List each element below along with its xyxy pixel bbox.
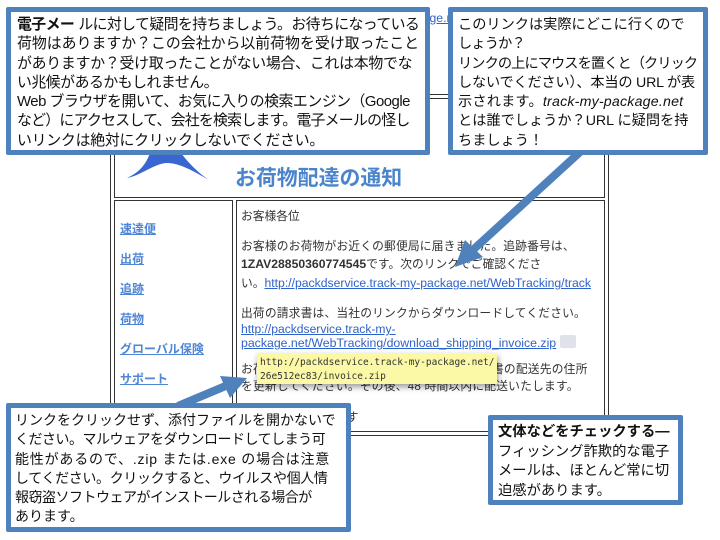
callout: where does the link go [448, 7, 708, 155]
link behind callouts: package.net [397, 11, 463, 25]
navigation cell [114, 200, 233, 432]
callout: check the tone: 迫感があります。 [498, 483, 611, 499]
callout: question the email: 電子メー ルに対して疑問を持ちましょう。お待ちになっている [17, 17, 419, 33]
navigation links: グローバル保険 [120, 342, 204, 356]
callout: check the tone: メールは、ほとんど常に切 [498, 463, 669, 479]
logo swoosh [127, 155, 209, 180]
email body text: http://packdservice.track-my- [241, 322, 396, 336]
email body text: よろしくお願いします [241, 411, 358, 424]
callout: do not open attachments [6, 403, 351, 532]
email body cell [236, 200, 605, 432]
callout: where does the link go: とは誰でしょうか？URL に疑問を持 [458, 113, 688, 129]
callout: where does the link go: ちましょう！ [458, 133, 543, 149]
callout: question the email: など）にアクセスして、会社を検索します。電子メールの怪し [17, 113, 410, 129]
callout: question the email: 荷物はありますか？この会社から以前荷物を受け取ったこと [17, 36, 419, 52]
email body text: い。http://packdservice.track-my-package.net/WebTracking/track [241, 276, 591, 290]
callout: question the email [6, 7, 430, 155]
arrow: attachment callout to tooltip [176, 376, 247, 403]
callout: do not open attachments: あります。 [15, 508, 84, 524]
navigation links: 追跡 [120, 282, 144, 296]
callout: where does the link go: このリンクは実際にどこに行くので [458, 17, 685, 33]
callout: do not open attachments: してください。クリックすると、ウイルスや個人情 [15, 470, 328, 486]
callout: do not open attachments: 能性があるので、.zip または.exe の場合は注意 [15, 451, 330, 467]
callout: question the email: いリンクは絶対にクリックしないでください。 [17, 133, 324, 149]
callout: question the email: い兆候があるかもしれません。 [17, 75, 218, 91]
tooltip: 26e512ec83/invoice.zip [260, 371, 386, 382]
callout: check the tone: 文体などをチェックする— [498, 424, 670, 440]
callout: question the email: Web ブラウザを開いて、お気に入りの検索エンジン（Google [17, 94, 410, 110]
attachment icon [560, 335, 576, 348]
callout: check the tone: フィッシング詐欺的な電子 [498, 444, 669, 460]
email body text: お荷物を受け取るには、この電子メールの請求書の配送先の住所 [241, 363, 588, 376]
callout: where does the link go: リンクの上にマウスを置くと（クリック [458, 56, 697, 72]
navigation links: 荷物 [120, 312, 144, 326]
navigation links [120, 222, 204, 386]
email body text [241, 210, 591, 424]
email outer frame [110, 94, 609, 436]
callout: do not open attachments: 報窃盗ソフトウェアがインストールされる場合が [15, 489, 312, 505]
navigation links: サポート [120, 372, 168, 386]
callout: do not open attachments: リンクをクリックせず、添付ファイルを開かないで [15, 412, 336, 428]
email body text: お客様のお荷物がお近くの郵便局に届きました。追跡番号は、 [241, 240, 575, 253]
email header cell [114, 98, 605, 198]
callout: where does the link go: しないでください）、本当の URL が表 [458, 75, 695, 91]
callout: question the email: がありますか？受け取ったことがない場合、これは本物でな [17, 56, 412, 72]
email body text: 1ZAV28850360774545です。次のリンクでご確認くださ [241, 257, 541, 271]
email title: お荷物配達の通知 [235, 167, 402, 190]
callout: do not open attachments: ください。マルウェアをダウンロードしてしまう可 [15, 431, 325, 447]
email body text: を更新してください。その後、48 時間以内に配送いたします。 [241, 380, 579, 393]
email body text: 出荷の請求書は、当社のリンクからダウンロードしてください。 [241, 307, 586, 320]
navigation links: 出荷 [120, 252, 144, 266]
email body text: package.net/WebTracking/download_shipping_invoice.zip [241, 336, 556, 350]
callout: where does the link go: 示されます。track-my-package.net [458, 94, 683, 110]
arrow: link callout to link [455, 155, 583, 267]
callout: where does the link go: しょうか？ [458, 36, 525, 52]
email body text: お客様各位 [241, 210, 300, 223]
navigation links: 速達便 [120, 222, 156, 236]
tooltip [257, 353, 497, 384]
tooltip: http://packdservice.track-my-package.net/ [260, 357, 494, 368]
callout: check the tone [488, 415, 683, 505]
